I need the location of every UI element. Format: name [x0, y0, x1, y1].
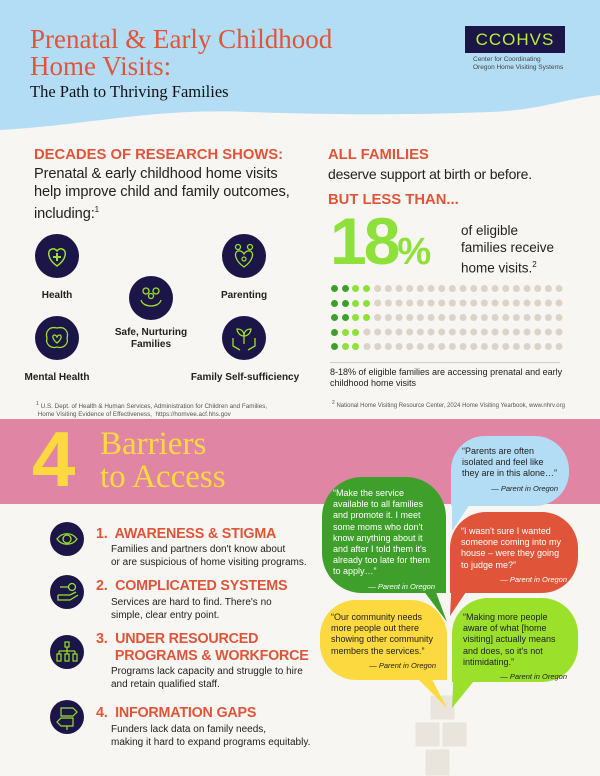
subtitle: The Path to Thriving Families [30, 82, 229, 101]
barrier 4: making it hard to expand programs equitably. [111, 736, 310, 748]
barrier 4 [50, 700, 310, 748]
barrier 3: 3. UNDER RESOURCED [96, 631, 258, 647]
outcomes icons: Parenting [221, 290, 267, 301]
dot chart caption: childhood home visits [330, 378, 416, 388]
barrier 1 [50, 522, 307, 568]
logo: Center for Coordinating [473, 56, 541, 63]
outcomes icons [24, 234, 300, 383]
quote: make service available: — Parent in Oregon [368, 582, 435, 591]
outcomes icons: Health [42, 290, 72, 301]
icon: safe nurturing families [129, 276, 173, 320]
big stat 18%: 18% [330, 204, 431, 278]
quote: isolated: “Parents are often isolated and feel like they are in this alone…” [462, 446, 557, 478]
quote: community needs: “Our community needs more people out there showing other community members the services.” [331, 612, 433, 656]
all families heading: ALL FAMILIES [328, 147, 429, 163]
barrier 4: Funders lack data on family needs, [111, 724, 266, 735]
barriers heading: to Access [100, 459, 226, 495]
decorative stem boxes [416, 696, 466, 776]
barriers heading: Barriers [100, 426, 206, 462]
barrier 2 [50, 575, 287, 620]
all families text: deserve support at birth or before. [328, 166, 532, 182]
stat text: families receive [461, 240, 554, 255]
icon: hand key [50, 575, 84, 609]
footnote 1 [36, 401, 267, 418]
research text: help improve child and family outcomes, [34, 184, 290, 200]
barrier 4: 4. INFORMATION GAPS [96, 705, 256, 721]
divider [330, 362, 560, 363]
icon: eye [50, 522, 84, 556]
outcomes icons: Families [131, 339, 171, 350]
icon: health [35, 234, 79, 278]
title: Prenatal & Early Childhood [30, 24, 332, 54]
barrier 1: Families and partners don't know about [111, 544, 285, 555]
research text: Prenatal & early childhood home visits [34, 166, 278, 182]
stat text: of eligible [461, 223, 518, 238]
quote: making aware: “Making more people aware of what [home visiting] actually means and does, so it's not intimidating.” [463, 612, 556, 667]
icon: parenting [222, 234, 266, 278]
header background wave [0, 0, 600, 130]
barriers heading [32, 415, 226, 503]
barrier 1: 1. AWARENESS & STIGMA [96, 526, 276, 542]
outcomes icons: Family Self-sufficiency [191, 372, 299, 383]
barriers heading: 4 [32, 415, 75, 503]
quote: make service available [322, 477, 446, 593]
icon: family self-sufficiency [222, 316, 266, 360]
footnote 2: 2 National Home Visiting Resource Center, 2024 Home Visiting Yearbook, www.nhrv.org [332, 400, 565, 409]
stat text [461, 223, 554, 276]
title [30, 24, 332, 81]
quote: community needs: — Parent in Oregon [369, 661, 436, 670]
footnote 1: Home Visiting Evidence of Effectiveness, https://homvee.acf.hhs.gov [38, 411, 231, 418]
footnote 1: 1 U.S. Dept. of Health & Human Services, Administration for Children and Families, [36, 401, 267, 410]
quote: isolated: — Parent in Oregon [491, 484, 558, 493]
icon: mental health [35, 316, 79, 360]
quote: judge me: “I wasn't sure I wanted someone coming into my house – were they going to judge me?” [461, 526, 561, 570]
quote bubbles [320, 436, 578, 708]
outcomes icons: Mental Health [24, 372, 90, 383]
barrier 3: PROGRAMS & WORKFORCE [115, 648, 309, 664]
quote: making aware: — Parent in Oregon [500, 672, 567, 681]
outcomes icons: Safe, Nurturing [115, 327, 187, 338]
dot chart [331, 285, 563, 350]
quote: isolated [451, 436, 569, 506]
but less than heading: BUT LESS THAN... [328, 192, 459, 208]
quote: judge me [450, 512, 578, 593]
research text [34, 166, 290, 222]
quote: making aware [452, 598, 578, 682]
barrier 3: and retain qualified staff. [111, 678, 220, 690]
barrier 3 [50, 631, 309, 690]
dot chart caption [330, 367, 562, 388]
title: Home Visits: [30, 51, 171, 81]
barrier 2: simple, clear entry point. [111, 610, 219, 620]
barrier 2: 2. COMPLICATED SYSTEMS [96, 578, 287, 594]
research heading: DECADES OF RESEARCH SHOWS: [34, 147, 283, 163]
quote: judge me: — Parent in Oregon [500, 575, 567, 584]
barrier 1: or are suspicious of home visiting programs. [111, 556, 307, 568]
stat text: home visits.2 [461, 260, 537, 276]
dot chart caption: 8-18% of eligible families are accessing prenatal and early [330, 367, 562, 377]
icon: org chart [50, 635, 84, 669]
pink band [0, 419, 600, 504]
icon: signpost [50, 700, 84, 734]
logo: CCOHVS [476, 30, 554, 49]
barrier 2: Services are hard to find. There's no [111, 597, 272, 608]
barrier 3: Programs lack capacity and struggle to hire [111, 666, 303, 677]
quote: community needs [320, 600, 447, 680]
research text: including:1 [34, 205, 99, 222]
logo: Oregon Home Visiting Systems [473, 64, 563, 71]
quote: make service available: “Make the service available to all families and promote it. I meet some moms who don't know anything about it and after I told them it's already too late for them to apply…” [333, 488, 430, 576]
logo [465, 26, 565, 71]
